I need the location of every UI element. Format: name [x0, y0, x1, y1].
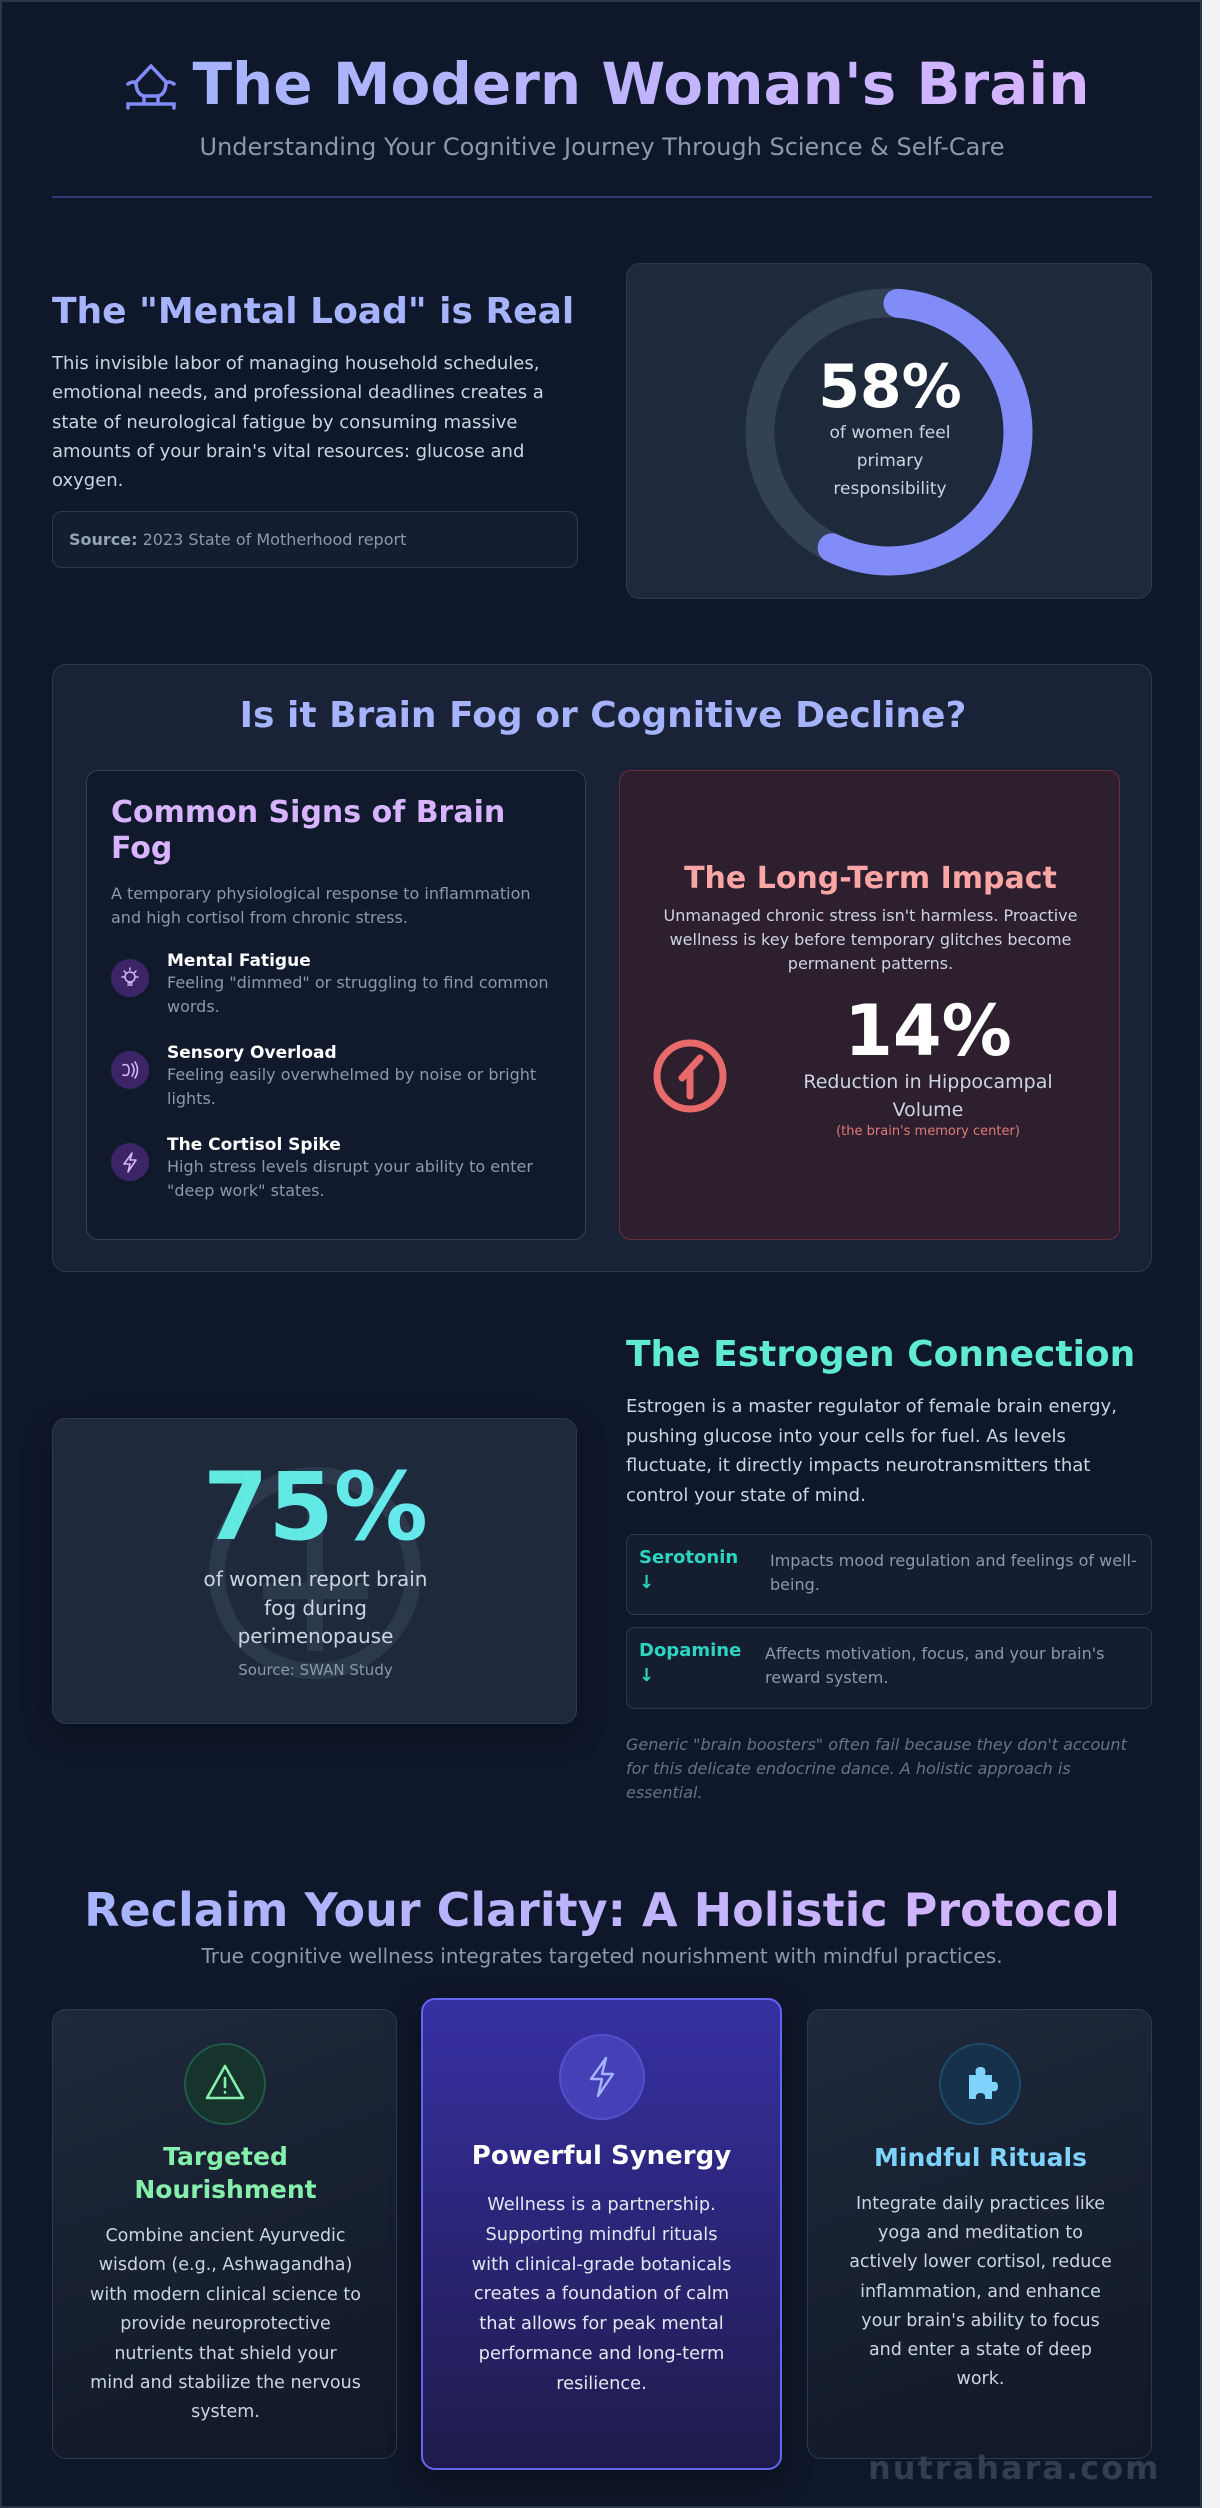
text: estrogen paragraph: Estrogen is a master regulator of female brain energy,	[626, 1396, 1117, 1417]
text	[90, 2226, 361, 2422]
source box: Source: 2023 State of Motherhood report	[69, 530, 406, 549]
item: sensory overload: Feeling easily overwhelmed by noise or bright	[167, 1065, 536, 1084]
card: mindful rituals	[807, 2009, 1152, 2459]
text: hippocampal	[803, 1071, 1053, 1121]
icon: lightning	[559, 2034, 645, 2120]
text: common signs description: and high cortisol from chronic stress.	[111, 908, 408, 927]
item: mental fatigue: words.	[167, 997, 220, 1016]
text: donut label: responsibility	[833, 479, 947, 499]
box: dopamine: Dopamine	[639, 1640, 741, 1661]
heading: reclaim: Reclaim Your Clarity: A Holistic Protocol	[84, 1883, 1120, 1937]
text: Supporting mindful rituals	[486, 2224, 717, 2245]
item: sensory overload: Sensory Overload	[167, 1043, 337, 1063]
text: estrogen paragraph: control your state of mind.	[626, 1484, 866, 1506]
text: performance and long-term	[479, 2343, 724, 2364]
text: wisdom (e.g., Ashwagandha)	[99, 2255, 352, 2275]
text: mental load paragraph: This invisible labor of managing household schedules,	[52, 353, 539, 374]
text: yoga and meditation to	[878, 2223, 1083, 2243]
text: estrogen paragraph: pushing glucose into your cells for fuel. As levels	[626, 1426, 1066, 1446]
text: resilience.	[556, 2373, 647, 2394]
panel: brain fog vs decline	[52, 664, 1152, 1272]
text: hippocampal: Reduction in Hippocampal	[803, 1071, 1053, 1093]
watermark: nutrahara.com	[868, 2449, 1160, 2487]
item: cortisol spike: The Cortisol Spike	[167, 1135, 341, 1155]
text: 75% label: perimenopause	[238, 1624, 393, 1648]
text: 75% label	[204, 1567, 427, 1648]
text: common signs description: A temporary physiological response to inflammation	[111, 884, 530, 903]
panel: long-term impact	[619, 770, 1120, 1240]
box: serotonin: being.	[770, 1575, 820, 1594]
icon: brain	[126, 64, 176, 110]
heading: common signs	[111, 795, 505, 866]
text: italic note: essential.	[626, 1783, 703, 1802]
text: 75% label: fog during	[264, 1596, 367, 1620]
text: Combine ancient Ayurvedic	[105, 2226, 346, 2246]
heading	[134, 2142, 317, 2204]
item: cortisol spike: High stress levels disrupt your ability to enter	[167, 1157, 533, 1176]
box: serotonin	[626, 1534, 1152, 1615]
box: dopamine: reward system.	[765, 1668, 888, 1687]
box: serotonin: Serotonin	[639, 1547, 738, 1568]
item: mental fatigue	[111, 951, 549, 1016]
heading: mental load: The "Mental Load" is Real	[52, 291, 574, 332]
icon: warning	[184, 2043, 266, 2125]
text: with modern clinical science to	[90, 2285, 361, 2305]
text: that allows for peak mental	[479, 2313, 724, 2334]
heading: estrogen: The Estrogen Connection	[626, 1334, 1135, 1375]
text: common signs description	[111, 884, 530, 927]
text: long-term description: Unmanaged chronic stress isn't harmless. Proactive	[664, 906, 1077, 925]
item: sensory overload: lights.	[167, 1089, 216, 1108]
icon: lightning	[111, 1143, 149, 1181]
text: donut label: primary	[857, 451, 923, 471]
text: long-term description	[664, 906, 1077, 973]
source box	[52, 511, 578, 568]
text: and enter a state of deep	[869, 2340, 1092, 2360]
box: dopamine: Affects motivation, focus, and your brain's	[765, 1644, 1104, 1663]
section: mental load	[52, 291, 578, 568]
text: nutrients that shield your	[114, 2344, 337, 2364]
item: mental fatigue: Feeling "dimmed" or struggling to find common	[167, 973, 549, 992]
heading: Targeted	[163, 2142, 288, 2171]
panel: donut 58%	[626, 263, 1152, 599]
text: mental load paragraph: amounts of your brain's vital resources: glucose and	[52, 441, 524, 462]
title: The Modern Woman's Brain	[192, 50, 1090, 118]
text: work.	[957, 2369, 1004, 2389]
card: targeted nourishment	[52, 2009, 397, 2459]
text: provide neuroprotective	[120, 2314, 331, 2334]
section: estrogen connection	[626, 1334, 1152, 1802]
chart: donut	[746, 288, 1032, 576]
text: 75% label: of women report brain	[204, 1567, 427, 1591]
box: dopamine: ↓	[639, 1665, 654, 1686]
text: italic note	[626, 1735, 1128, 1802]
text: swan source: Source: SWAN Study	[238, 1661, 393, 1679]
text: your brain's ability to focus	[861, 2311, 1100, 2331]
stat: 14%: 14%	[844, 990, 1012, 1072]
icon: bulb	[111, 959, 149, 997]
text: mental load paragraph: oxygen.	[52, 470, 123, 491]
heading: common signs: Common Signs of Brain	[111, 795, 505, 830]
heading: Nourishment	[134, 2175, 317, 2204]
text: Integrate daily practices like	[856, 2194, 1105, 2214]
item: cortisol spike	[111, 1135, 533, 1200]
card: powerful synergy	[421, 1998, 782, 2470]
heading: long-term impact: The Long-Term Impact	[684, 861, 1057, 896]
icon: puzzle	[939, 2043, 1021, 2125]
text: actively lower cortisol, reduce	[849, 2252, 1112, 2272]
text: with clinical-grade botanicals	[472, 2254, 731, 2275]
text: mind and stabilize the nervous	[90, 2373, 361, 2393]
heading: Powerful Synergy	[472, 2141, 731, 2171]
box: serotonin: ↓	[639, 1572, 654, 1593]
heading: Mindful Rituals	[874, 2143, 1087, 2172]
stat: 75%	[53, 1453, 578, 1563]
heading: common signs: Fog	[111, 831, 172, 866]
box: dopamine	[626, 1627, 1152, 1709]
text: estrogen paragraph: fluctuate, it directly impacts neurotransmitters that	[626, 1455, 1090, 1476]
text: mental load paragraph	[52, 353, 544, 491]
text: long-term description: wellness is key before temporary glitches become	[670, 930, 1071, 949]
icon: gauge	[654, 1040, 726, 1112]
item: mental fatigue: Mental Fatigue	[167, 951, 311, 971]
text	[849, 2194, 1112, 2389]
panel: common signs	[86, 770, 586, 1240]
item: sensory overload	[111, 1043, 536, 1108]
text: memory center: (the brain's memory center)	[836, 1124, 1020, 1139]
heading: brain fog or decline: Is it Brain Fog or Cognitive Decline?	[240, 695, 966, 736]
icon: faint background clock	[209, 1467, 421, 1679]
box: serotonin: Impacts mood regulation and feelings of well-	[770, 1551, 1137, 1570]
item: cortisol spike: "deep work" states.	[167, 1181, 325, 1200]
text: system.	[191, 2402, 260, 2422]
text: donut label	[830, 423, 950, 499]
text	[472, 2194, 731, 2394]
text: italic note: for this delicate endocrine dance. A holistic approach is	[626, 1759, 1071, 1778]
text: inflammation, and enhance	[860, 2282, 1101, 2302]
text: creates a foundation of calm	[474, 2283, 729, 2304]
stat: 75%: 75%	[203, 1453, 428, 1562]
text: donut label: of women feel	[830, 423, 950, 443]
subtitle: Understanding Your Cognitive Journey Through Science & Self-Care	[200, 133, 1004, 161]
text: hippocampal: Volume	[893, 1099, 963, 1121]
stat: 58%: 58%	[818, 352, 962, 422]
text: Wellness is a partnership.	[487, 2194, 716, 2215]
text: long-term description: permanent patterns.	[788, 954, 953, 973]
subtitle: reclaim: True cognitive wellness integrates targeted nourishment with mindful practices.	[201, 1944, 1003, 1968]
panel: 75% stat	[52, 1418, 577, 1724]
text: italic note: Generic "brain boosters" often fail because they don't account	[626, 1735, 1127, 1754]
text: mental load paragraph: state of neurological fatigue by consuming massive	[52, 412, 518, 433]
icon: sound waves	[111, 1051, 149, 1089]
text: estrogen paragraph	[626, 1396, 1117, 1506]
text: mental load paragraph: emotional needs, and professional deadlines creates a	[52, 382, 544, 403]
